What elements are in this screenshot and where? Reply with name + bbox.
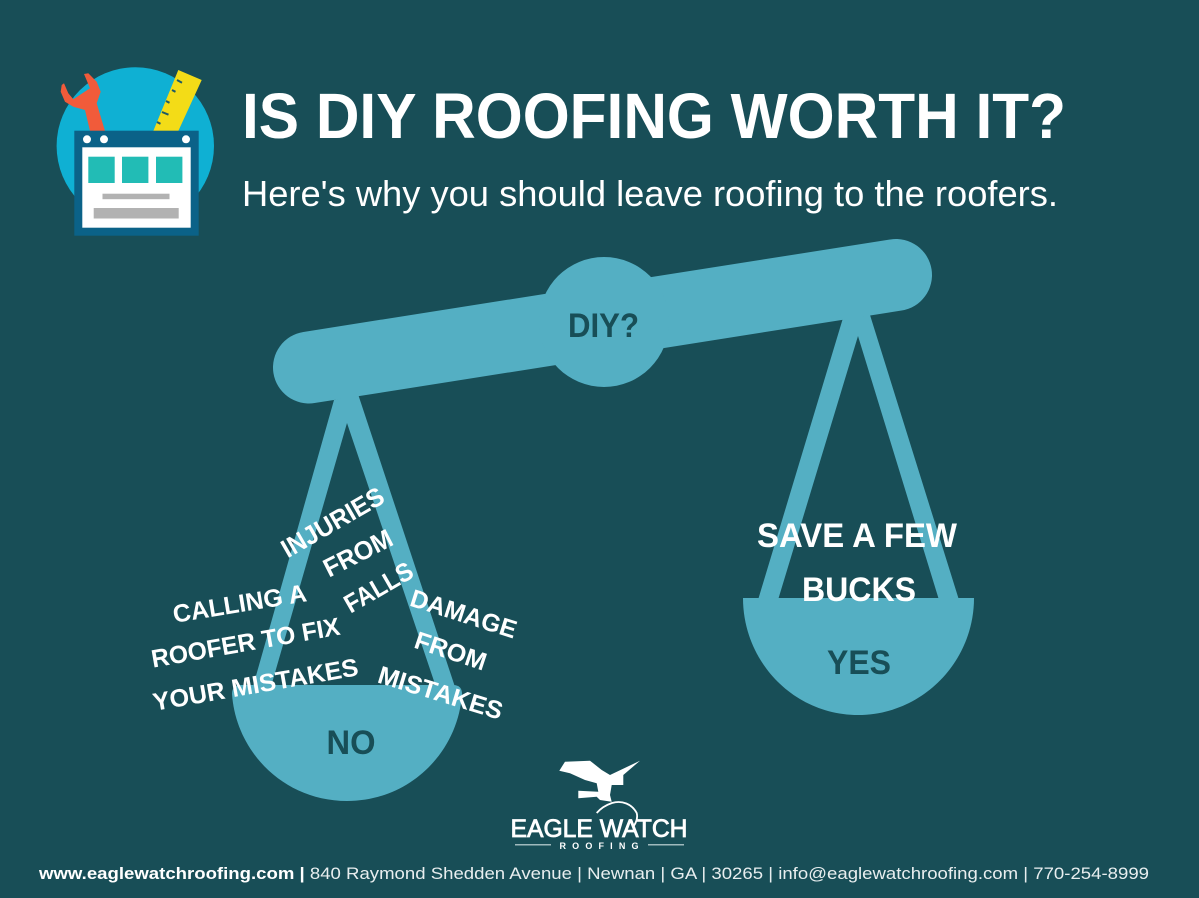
scale beam xyxy=(309,275,896,368)
text: save a few bucks: SAVE A FEW xyxy=(757,517,958,555)
right pan: YES xyxy=(743,598,974,715)
balance scale xyxy=(232,257,974,801)
text: calling a roofer to fix your mistakes: CALLING A xyxy=(171,579,309,629)
left pan: NO xyxy=(232,685,462,801)
text: calling a roofer to fix your mistakes xyxy=(149,579,360,717)
text: damage from mistakes: FROM xyxy=(411,626,490,676)
right pan: YES: YES xyxy=(827,644,891,682)
left pan hangers xyxy=(252,394,456,690)
scale pivot with DIY label: DIY? xyxy=(568,307,639,345)
text: injuries from falls xyxy=(276,481,418,619)
text: calling a roofer to fix your mistakes: YOUR MISTAKES xyxy=(151,653,360,717)
text: injuries from falls: FALLS xyxy=(339,555,418,619)
logo: Eagle Watch Roofing: EAGLE WATCH xyxy=(510,815,688,843)
text: save a few bucks: BUCKS xyxy=(802,571,916,609)
logo: Eagle Watch Roofing xyxy=(510,761,688,851)
text: damage from mistakes xyxy=(375,584,520,726)
text: injuries from falls: INJURIES xyxy=(276,481,389,564)
icon: toolbox window with wrench and ruler xyxy=(57,67,214,236)
text: damage from mistakes: DAMAGE xyxy=(407,584,520,644)
text: damage from mistakes: MISTAKES xyxy=(375,661,506,726)
text: save a few bucks xyxy=(757,517,958,609)
left pan: NO: NO xyxy=(326,724,376,762)
icon: eagle xyxy=(559,761,640,802)
text: injuries from falls: FROM xyxy=(318,523,398,583)
text: calling a roofer to fix your mistakes: ROOFER TO FIX xyxy=(149,613,342,673)
scale pivot with DIY label xyxy=(539,257,669,387)
title: IS DIY ROOFING WORTH IT? xyxy=(242,80,1066,152)
logo: Eagle Watch Roofing: ROOFING xyxy=(560,841,638,851)
subtitle: Here's why you should leave roofing to the roofers. xyxy=(242,173,1058,214)
right pan hangers xyxy=(758,315,959,600)
footer contact line: www.eaglewatchroofing.com | 840 Raymond Shedden Avenue | Newnan | GA | 30265 | info@eaglewatchroofing.com | 770-254-8999 xyxy=(38,864,1149,883)
